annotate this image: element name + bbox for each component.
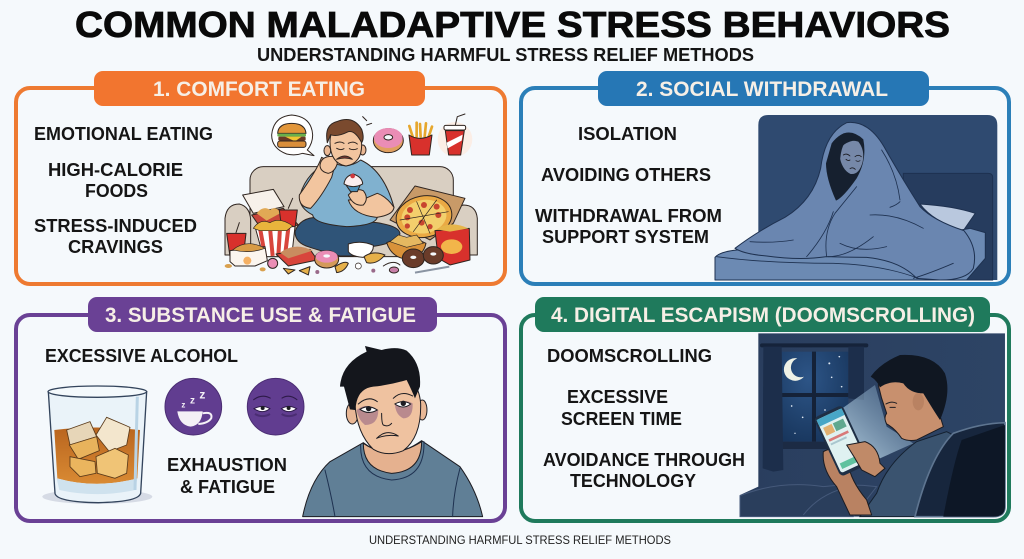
- header: social withdrawal: [598, 71, 929, 106]
- phone light beam: [840, 385, 913, 458]
- text list: digital escapism: DOOMSCROLLING: [547, 346, 712, 366]
- icon: soda cup: [438, 114, 472, 157]
- dark room background: [740, 333, 1005, 517]
- header: comfort eating: 1. COMFORT EATING: [153, 78, 365, 101]
- header: digital escapism: [535, 297, 990, 332]
- text list: social withdrawal: WITHDRAWAL FROM: [535, 206, 722, 226]
- man: [295, 117, 400, 257]
- window with moon: [760, 343, 868, 472]
- text list: comfort eating: STRESS-INDUCED: [34, 216, 197, 236]
- text list: comfort eating: HIGH-CALORIE: [48, 160, 183, 180]
- subtitle: UNDERSTANDING HARMFUL STRESS RELIEF METHODS: [257, 45, 754, 65]
- header: social withdrawal: 2. SOCIAL WITHDRAWAL: [636, 78, 888, 101]
- text list: comfort eating: EMOTIONAL EATING: [34, 124, 213, 144]
- text list: social withdrawal: SUPPORT SYSTEM: [542, 227, 709, 247]
- text list: social withdrawal: [535, 124, 722, 247]
- text list: digital escapism: SCREEN TIME: [561, 409, 682, 429]
- title: COMMON MALADAPTIVE STRESS BEHAVIORS: [75, 4, 950, 45]
- speech bubble: burger: [272, 115, 314, 156]
- label: exhaustion and fatigue: EXHAUSTION: [167, 455, 287, 475]
- illustration: man comfort eating on sofa: [225, 114, 477, 275]
- header: substance use and fatigue: [88, 297, 437, 332]
- icon: whiskey glass with ice: [42, 386, 152, 504]
- text list: comfort eating: FOODS: [85, 181, 148, 201]
- illustration: man doomscrolling in bed at night: [740, 333, 1005, 517]
- icon: coffee cup with zzz: z: [181, 400, 185, 409]
- bedroom background: [758, 115, 997, 280]
- text list: digital escapism: [543, 346, 745, 491]
- label: exhaustion and fatigue: [167, 455, 287, 497]
- header: digital escapism: 4. DIGITAL ESCAPISM (DOOMSCROLLING): [551, 304, 975, 327]
- panel: comfort eating: [16, 71, 505, 284]
- icon: donut: [373, 128, 403, 153]
- text list: digital escapism: EXCESSIVE: [567, 387, 668, 407]
- text list: comfort eating: CRAVINGS: [68, 237, 163, 257]
- panel: digital escapism: [521, 297, 1009, 521]
- illustration: woman under blanket on bed: [715, 115, 997, 280]
- woman face and hair: [826, 133, 864, 201]
- text list: social withdrawal: AVOIDING OTHERS: [541, 165, 711, 185]
- icon: coffee cup with zzz: z: [190, 395, 195, 406]
- header: substance use and fatigue: 3. SUBSTANCE USE & FATIGUE: [105, 304, 416, 327]
- headboard: [903, 173, 993, 280]
- header: comfort eating: [94, 71, 425, 106]
- footer caption: UNDERSTANDING HARMFUL STRESS RELIEF METHODS: [369, 533, 671, 547]
- bed: [715, 228, 985, 280]
- tired man: [303, 346, 483, 517]
- pillow: [920, 204, 975, 231]
- scattered snacks: [225, 251, 449, 275]
- icon: tired eyes: [247, 378, 304, 435]
- man: [860, 355, 963, 517]
- icon: fries: [409, 123, 432, 155]
- label: exhaustion and fatigue: & FATIGUE: [180, 477, 275, 497]
- food boxes left: [227, 189, 317, 268]
- icon: coffee cup with zzz: [165, 378, 222, 435]
- text list: digital escapism: AVOIDANCE THROUGH: [543, 450, 745, 470]
- sofa: [225, 167, 477, 257]
- hands holding phone: [813, 405, 885, 515]
- text list: digital escapism: TECHNOLOGY: [570, 471, 696, 491]
- panel: social withdrawal: [521, 71, 1009, 284]
- text list: social withdrawal: ISOLATION: [578, 124, 677, 144]
- panel: substance use and fatigue: [16, 297, 505, 521]
- blanket: [717, 122, 975, 280]
- text list: comfort eating: [34, 124, 213, 257]
- icon: coffee cup with zzz: z: [199, 388, 205, 402]
- label: excessive alcohol: EXCESSIVE ALCOHOL: [45, 346, 238, 366]
- pizza box and food right: [387, 186, 470, 268]
- bed and pillow: [740, 423, 1005, 517]
